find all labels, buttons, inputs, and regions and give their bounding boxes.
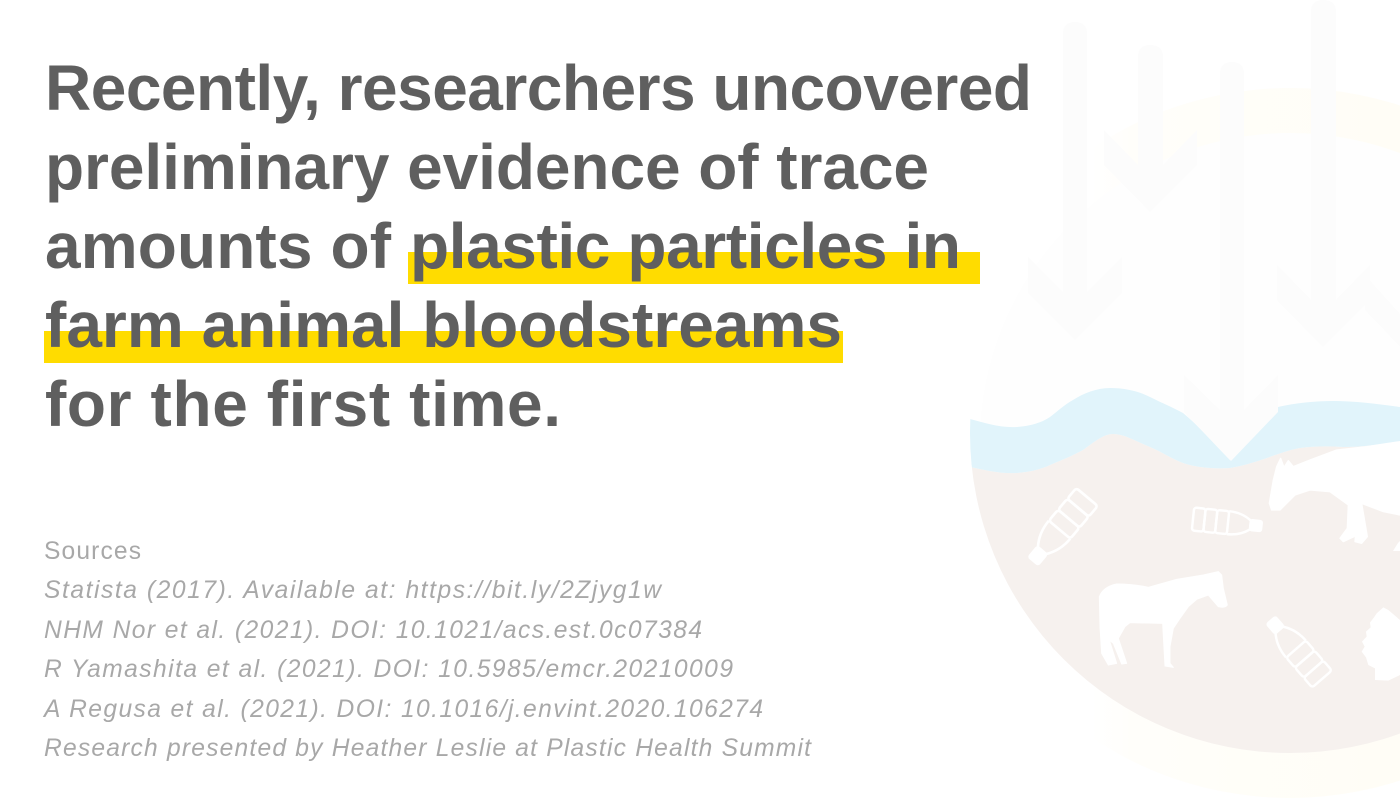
icon: turkey xyxy=(1362,607,1400,681)
water layer xyxy=(960,388,1400,473)
heading: amounts of xyxy=(45,210,392,282)
arrow 3 xyxy=(1184,62,1278,461)
heading: Recently, researchers uncovered xyxy=(45,52,1032,124)
sources list: Statista (2017). Available at: https://bit.ly/2Zjyg1w xyxy=(44,577,663,604)
icon: cow xyxy=(1269,442,1400,543)
animals and bottles inside the soil xyxy=(1023,442,1400,688)
sources list xyxy=(42,538,812,762)
icon: bottle 2 xyxy=(1192,508,1263,538)
soil layer xyxy=(972,434,1400,753)
heading: for the first time. xyxy=(45,368,561,440)
background globe: faint yellow ring xyxy=(935,88,1400,798)
globe cross-section: soil and water xyxy=(970,388,1400,753)
icon: bottle 3 xyxy=(1261,612,1332,688)
icon: bottle 1 xyxy=(1023,488,1098,570)
sources list: NHM Nor et al. (2021). DOI: 10.1021/acs.est.0c07384 xyxy=(44,617,702,644)
highlight bar: line 3 xyxy=(408,252,980,284)
arrow 2 xyxy=(1104,45,1197,212)
arrow 4 xyxy=(1277,0,1370,347)
sources list: Sources xyxy=(44,538,141,565)
heading xyxy=(45,52,1032,440)
heading: farm animal bloodstreams xyxy=(45,289,842,361)
icon: small animal at edge xyxy=(1393,541,1400,551)
sources list: R Yamashita et al. (2021). DOI: 10.5985/emcr.20210009 xyxy=(44,656,733,683)
highlight bar: line 4 xyxy=(44,331,843,363)
heading: preliminary evidence of trace xyxy=(45,131,929,203)
heading: plastic particles in xyxy=(410,210,961,282)
sources list: Research presented by Heather Leslie at Plastic Health Summit xyxy=(44,735,812,762)
icon: horse xyxy=(1099,572,1227,667)
sources list: A Regusa et al. (2021). DOI: 10.1016/j.envint.2020.106274 xyxy=(42,696,763,723)
arrows falling into the water xyxy=(1028,0,1400,461)
arrow 1 xyxy=(1028,22,1122,340)
arrow 5 xyxy=(1365,275,1400,357)
